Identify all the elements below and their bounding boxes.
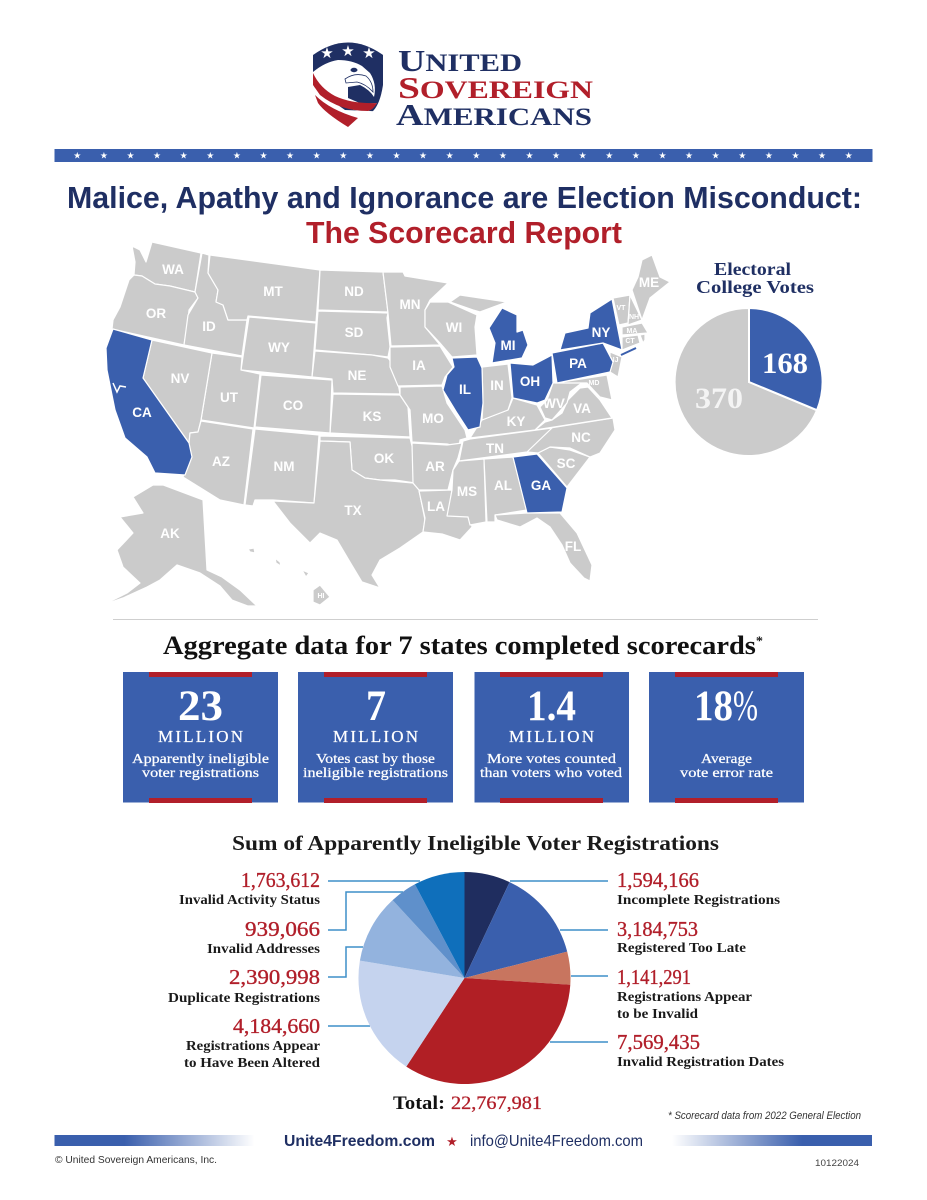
state MN: MN — [400, 297, 420, 312]
highlighted state CA: CA — [132, 405, 152, 420]
state AK: AK — [160, 526, 180, 541]
stat card: 1.4 million: MILLION — [509, 727, 594, 746]
label: invalid registration dates: 7,569,435 — [617, 1030, 700, 1054]
footer contact: info@Unite4Freedom.com — [470, 1133, 643, 1150]
state ND: ND — [344, 284, 364, 299]
state WA: WA — [162, 262, 184, 277]
label: altered registrations: to Have Been Altered — [184, 1056, 320, 1071]
state MA: MA — [627, 328, 637, 335]
state MN — [383, 272, 448, 346]
registrations pie chart — [358, 872, 571, 1084]
state IA — [390, 346, 453, 386]
state VT: VT — [617, 305, 626, 312]
state WA — [132, 242, 201, 292]
stat card: 7 million: ineligible registrations — [303, 766, 448, 781]
state NH — [628, 295, 642, 325]
state AZ: AZ — [212, 454, 230, 469]
state NC: NC — [571, 430, 591, 445]
stat card: 18 percent: % — [733, 683, 758, 730]
state OR — [112, 275, 198, 345]
state ND — [318, 270, 388, 312]
logo wordmark: SOVEREIGN — [398, 70, 593, 105]
label: invalid addresses: Invalid Addresses — [207, 942, 321, 957]
state ME: ME — [639, 275, 659, 290]
state VA: VA — [573, 401, 591, 416]
label: appear invalid: 1,141,291 — [617, 965, 691, 989]
state MT — [208, 255, 320, 322]
copyright: © United Sovereign Americans, Inc. — [55, 1154, 217, 1166]
state NH: NH — [629, 314, 639, 321]
title: The Scorecard Report — [306, 215, 622, 250]
electoral pie chart — [675, 308, 823, 456]
state WY: WY — [268, 340, 290, 355]
state NV — [143, 340, 212, 443]
state UT: UT — [220, 390, 239, 405]
registrations heading: Sum of Apparently Ineligible Voter Registrations — [232, 831, 719, 855]
label: invalid activity status: 1,763,612 — [241, 868, 320, 892]
leader lines — [328, 881, 608, 1042]
state HI — [248, 548, 330, 605]
stat card: 1.4 million — [474, 672, 629, 803]
stat card: 18 percent — [649, 672, 804, 803]
footer contact — [284, 1133, 643, 1150]
stat card: 7 million: Votes cast by those — [316, 752, 435, 767]
stat card: 7 million: MILLION — [333, 727, 418, 746]
state LA: LA — [427, 499, 445, 514]
state MT: MT — [263, 284, 283, 299]
electoral heading: Electoral — [714, 259, 791, 279]
highlighted state OH — [510, 355, 553, 403]
highlighted state OH: OH — [520, 374, 540, 389]
stat card: 7 million: 7 — [366, 683, 386, 730]
state TX: TX — [344, 503, 362, 518]
label: invalid addresses: 939,066 — [245, 917, 320, 941]
state ID — [184, 253, 247, 356]
state MO — [400, 386, 467, 447]
stat card: 7 million — [298, 672, 453, 803]
total: Total: — [393, 1093, 445, 1114]
aggregate heading: Aggregate data for 7 states completed scorecards — [163, 631, 705, 660]
logo shield: ★ — [341, 42, 355, 60]
highlighted state IL: IL — [459, 382, 471, 397]
footer contact: Unite4Freedom.com — [284, 1133, 435, 1150]
state WI: WI — [446, 320, 462, 335]
state IN — [482, 364, 512, 420]
state IN: IN — [490, 378, 504, 393]
state AR: AR — [425, 459, 445, 474]
state UT — [201, 353, 260, 428]
highlighted state PA: PA — [569, 356, 587, 371]
state MS: MS — [457, 484, 477, 499]
label: registered too late: 3,184,753 — [617, 917, 698, 941]
label: incomplete registrations: Incomplete Registrations — [617, 893, 781, 908]
state KS: KS — [363, 409, 381, 424]
footer gradient bars — [54, 1135, 872, 1146]
total: 22,767,981 — [451, 1093, 542, 1114]
logo wordmark: AMERICANS — [396, 97, 592, 132]
state WV: WV — [543, 396, 565, 411]
state NJ — [610, 352, 622, 377]
highlighted state NY — [560, 299, 636, 355]
label: duplicate registrations — [168, 965, 321, 1006]
state MO: MO — [422, 411, 444, 426]
highlighted state PA — [552, 343, 613, 383]
stat card: 23 million: Apparently ineligible — [132, 752, 269, 767]
state SD: SD — [345, 325, 364, 340]
stat card: 23 million: MILLION — [158, 727, 243, 746]
state AL: AL — [494, 478, 512, 493]
label: duplicate registrations: Duplicate Registrations — [168, 991, 321, 1006]
state CO — [255, 375, 332, 433]
state HI: HI — [318, 593, 325, 600]
state NM: NM — [274, 459, 294, 474]
highlighted state CA — [106, 329, 192, 475]
state NM — [245, 429, 319, 506]
state SC: SC — [557, 456, 576, 471]
state LA — [419, 490, 472, 540]
electoral heading — [696, 259, 814, 297]
highlighted state GA — [513, 454, 567, 513]
stat card: 18 percent: Average — [701, 752, 752, 767]
state TN: TN — [486, 441, 504, 456]
stat card: 23 million: voter registrations — [142, 766, 259, 781]
logo shield: ★ — [320, 44, 334, 62]
label: invalid activity status: Invalid Activity Status — [179, 893, 321, 908]
highlighted state MI — [489, 308, 528, 363]
label: duplicate registrations: 2,390,998 — [229, 965, 320, 989]
state OK — [320, 436, 415, 483]
label: appear invalid — [617, 965, 752, 1022]
stat card: 1.4 million: 1.4 — [527, 683, 576, 730]
state TN — [459, 428, 552, 461]
logo wordmark: UNITED — [398, 43, 522, 78]
state MA — [622, 323, 648, 335]
state AR — [412, 443, 462, 490]
label: appear invalid: Registrations Appear — [617, 990, 752, 1005]
state AK — [103, 485, 257, 606]
label: incomplete registrations: 1,594,166 — [617, 868, 699, 892]
electoral pie chart: 370 — [695, 382, 743, 415]
label: registered too late — [617, 917, 746, 956]
stat card: 23 million — [123, 672, 278, 803]
total — [393, 1093, 542, 1114]
label: invalid activity status — [179, 868, 321, 908]
state OR: OR — [146, 306, 166, 321]
footer contact: ★ — [446, 1135, 458, 1150]
electoral pie chart: 168 — [762, 347, 808, 380]
state KY: KY — [507, 414, 525, 429]
label: invalid registration dates — [617, 1030, 785, 1070]
aggregate heading: * — [756, 633, 763, 648]
label: registered too late: Registered Too Late — [617, 941, 746, 956]
label: invalid registration dates: Invalid Registration Dates — [617, 1055, 785, 1070]
highlighted state GA: GA — [531, 478, 551, 493]
electoral college votes — [675, 259, 823, 456]
state TX — [273, 441, 425, 588]
state NC — [527, 418, 615, 457]
label: appear invalid: to be Invalid — [617, 1007, 698, 1022]
state MS — [447, 459, 486, 525]
title: Malice, Apathy and Ignorance are Election Misconduct: — [67, 180, 862, 215]
state WY — [241, 317, 316, 377]
logo — [311, 42, 593, 132]
highlighted state NY: NY — [592, 325, 610, 340]
state VA — [535, 387, 612, 430]
state KY — [470, 398, 545, 438]
state ME — [632, 255, 670, 320]
stat card: 1.4 million: than voters who voted — [480, 766, 622, 781]
stat card: 1.4 million: More votes counted — [487, 752, 616, 767]
state RI — [640, 334, 645, 343]
highlighted state MI: MI — [500, 338, 516, 353]
state CT — [622, 335, 640, 350]
star band: ★★★★★★★★★★★★★★★★★★★★★★★★★★★★★★ — [73, 152, 853, 162]
state SD — [315, 311, 390, 357]
state SC — [538, 447, 590, 487]
state MD: MD — [589, 380, 599, 387]
title — [67, 180, 862, 250]
state NE: NE — [348, 368, 366, 383]
US map — [103, 242, 670, 606]
state ID: ID — [202, 319, 216, 334]
state MD — [555, 375, 612, 400]
stat card: 18 percent: vote error rate — [680, 766, 773, 781]
stat card: 18 percent: 18 — [694, 683, 733, 730]
upper Michigan peninsula — [450, 295, 507, 312]
logo wordmark — [396, 43, 593, 132]
document code: 10122024 — [815, 1158, 859, 1169]
state IA: IA — [412, 358, 426, 373]
state FL — [495, 513, 592, 581]
state CT: CT — [625, 338, 635, 345]
state WV — [540, 382, 583, 420]
logo shield: ★ — [362, 44, 376, 62]
stat card: 23 million: 23 — [178, 683, 223, 730]
footnote: * Scorecard data from 2022 General Election — [668, 1110, 861, 1122]
state VT — [613, 295, 630, 325]
state OK: OK — [374, 451, 394, 466]
state NV: NV — [171, 371, 189, 386]
label: altered registrations — [184, 1014, 320, 1071]
logo shield — [311, 42, 386, 130]
electoral heading: College Votes — [696, 277, 814, 297]
label: invalid addresses — [207, 917, 321, 957]
state AL — [484, 457, 527, 522]
state NJ: NJ — [610, 357, 619, 364]
state WI — [425, 302, 477, 357]
state FL: FL — [565, 539, 581, 554]
state KS — [330, 394, 410, 437]
label: altered registrations: Registrations Appear — [186, 1039, 320, 1054]
state CO: CO — [283, 398, 303, 413]
state AZ — [183, 421, 253, 505]
label: altered registrations: 4,184,660 — [233, 1014, 320, 1038]
state NE — [312, 351, 400, 394]
highlighted state IL — [443, 357, 483, 430]
label: incomplete registrations — [617, 868, 781, 908]
